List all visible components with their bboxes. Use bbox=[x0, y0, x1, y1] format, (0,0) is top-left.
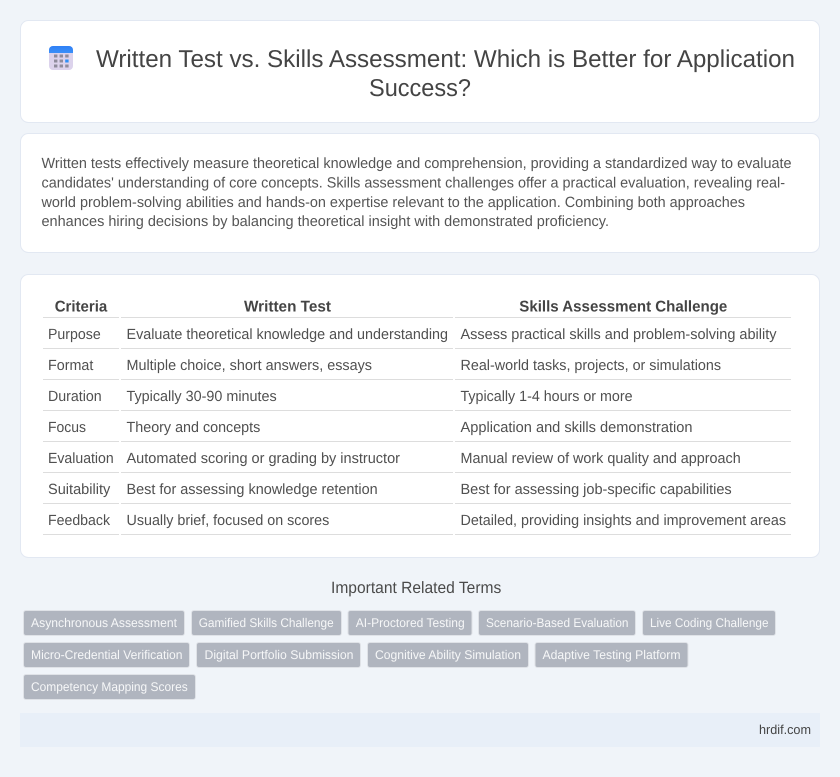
tag: Cognitive Ability Simulation bbox=[375, 648, 521, 662]
title bbox=[96, 46, 795, 102]
tag bbox=[535, 642, 688, 668]
tag bbox=[24, 642, 190, 668]
panel: header card bbox=[20, 20, 820, 122]
table header row: Skills Assessment Challenge bbox=[519, 298, 728, 316]
row: format: Multiple choice, short answers, essays bbox=[126, 358, 372, 374]
table header row bbox=[55, 298, 728, 316]
footer bar bbox=[20, 713, 820, 747]
panel: summary paragraph: world problem-solving abilities and hands-on expertise relevant to the application. Combining both approaches bbox=[41, 195, 745, 211]
tag bbox=[24, 610, 184, 636]
tag bbox=[348, 610, 472, 636]
row: evaluation: Automated scoring or grading by instructor bbox=[126, 451, 400, 467]
row: suitability: Suitability bbox=[48, 482, 111, 498]
tag bbox=[478, 610, 636, 636]
row: purpose: Evaluate theoretical knowledge and understanding bbox=[126, 327, 448, 343]
tag bbox=[24, 674, 196, 700]
tag: Digital Portfolio Submission bbox=[204, 648, 354, 662]
row: suitability bbox=[48, 482, 732, 498]
tag bbox=[368, 642, 528, 668]
row: format: Format bbox=[48, 358, 93, 374]
row: focus: Application and skills demonstration bbox=[460, 420, 692, 436]
tag: Adaptive Testing Platform bbox=[542, 648, 680, 662]
row: format: Real-world tasks, projects, or simulations bbox=[460, 358, 721, 374]
row: feedback: Feedback bbox=[48, 513, 111, 529]
row: purpose: Purpose bbox=[48, 327, 101, 343]
related term tags bbox=[24, 610, 776, 700]
row: feedback: Detailed, providing insights and improvement areas bbox=[460, 513, 786, 529]
panel: summary paragraph bbox=[20, 134, 820, 252]
row: format bbox=[48, 358, 721, 374]
panel: summary paragraph: candidates' understanding of core concepts. Skills assessment challenges offer a practical evaluation, revealing real- bbox=[42, 176, 785, 192]
tag bbox=[642, 610, 776, 636]
tag: Micro-Credential Verification bbox=[31, 648, 182, 662]
row: duration: Typically 1-4 hours or more bbox=[460, 389, 632, 405]
row: duration: Duration bbox=[48, 389, 102, 405]
heading: important related terms: Important Related Terms bbox=[331, 579, 501, 597]
row: duration bbox=[48, 389, 632, 405]
panel: summary paragraph: Written tests effectively measure theoretical knowledge and comprehension, providing a standardized way to evaluate bbox=[42, 156, 792, 172]
title: Success? bbox=[369, 75, 471, 102]
panel: summary paragraph: enhances hiring decisions by balancing theoretical insight with demonstrated proficiency. bbox=[42, 214, 609, 230]
row: suitability: Best for assessing job-specific capabilities bbox=[460, 482, 732, 498]
row: purpose: Assess practical skills and problem-solving ability bbox=[460, 327, 777, 343]
row: evaluation: Manual review of work quality and approach bbox=[460, 451, 741, 467]
row: focus bbox=[48, 420, 692, 436]
table header row: Written Test bbox=[244, 298, 331, 316]
tag bbox=[192, 610, 342, 636]
tag bbox=[196, 642, 360, 668]
row: evaluation: Evaluation bbox=[48, 451, 114, 467]
panel: comparison table bbox=[20, 274, 820, 558]
row: duration: Typically 30-90 minutes bbox=[126, 389, 277, 405]
tag: Competency Mapping Scores bbox=[31, 680, 188, 694]
tag: Scenario-Based Evaluation bbox=[486, 616, 628, 630]
row: suitability: Best for assessing knowledge retention bbox=[126, 482, 378, 498]
tag: AI-Proctored Testing bbox=[356, 616, 465, 630]
footer bar: hrdif.com bbox=[759, 722, 811, 737]
row: focus: Focus bbox=[48, 420, 86, 436]
icon: calendar bbox=[49, 46, 73, 70]
row: feedback: Usually brief, focused on scores bbox=[126, 513, 329, 529]
table header row: Criteria bbox=[55, 298, 108, 316]
tag: Live Coding Challenge bbox=[650, 616, 768, 630]
title: Written Test vs. Skills Assessment: Which is Better for Application bbox=[96, 46, 795, 73]
row: purpose bbox=[48, 327, 777, 343]
row: feedback bbox=[48, 513, 786, 529]
row: focus: Theory and concepts bbox=[126, 420, 260, 436]
tag: Asynchronous Assessment bbox=[31, 616, 177, 630]
row: evaluation bbox=[48, 451, 741, 467]
tag: Gamified Skills Challenge bbox=[199, 616, 334, 630]
